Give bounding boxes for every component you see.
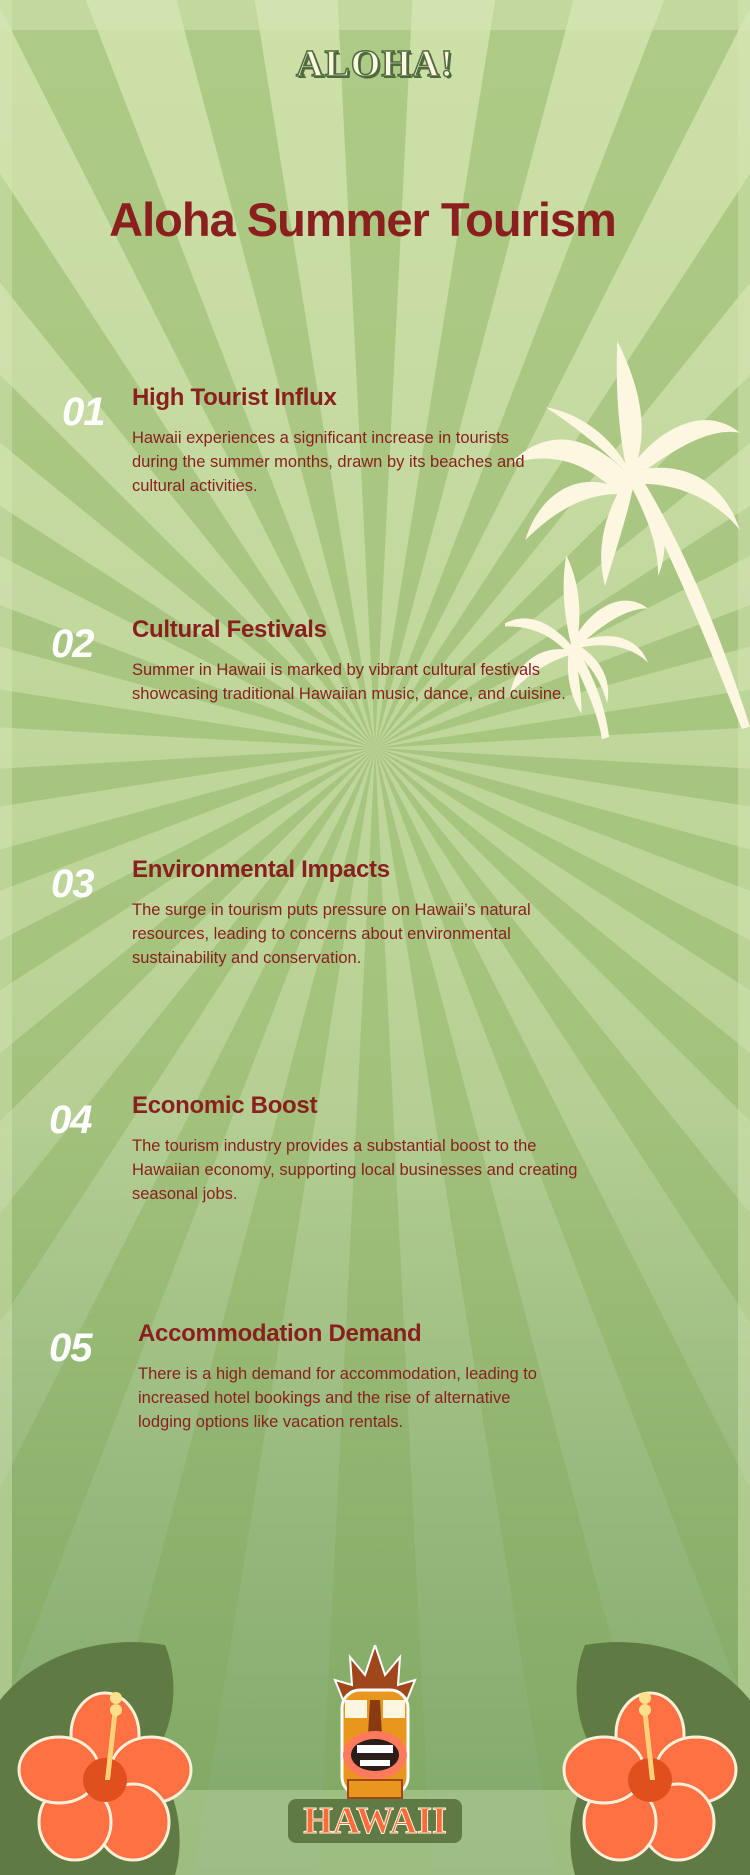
item 01: High Tourist Influx	[132, 384, 336, 411]
item 04: 04	[49, 1098, 92, 1142]
icon: tiki mask	[333, 1645, 417, 1799]
item 01	[62, 384, 525, 495]
item 03: The surge in tourism puts pressure on Hawaii’s natural resources, leading to concerns about environmental sustainability and conservation.	[132, 901, 531, 967]
item 04: Economic Boost	[132, 1092, 317, 1119]
footer badge HAWAII: HAWAII	[303, 1800, 447, 1842]
item 04	[49, 1092, 577, 1203]
item 05: 05	[49, 1326, 92, 1370]
item 02: 02	[51, 622, 94, 666]
item 02: Summer in Hawaii is marked by vibrant cultural festivals showcasing traditional Hawaiian music, dance, and cuisine.	[132, 661, 566, 703]
title: Aloha Summer Tourism	[109, 193, 616, 246]
item 03: 03	[51, 862, 94, 906]
item 01: Hawaii experiences a significant increase in tourists during the summer months, drawn by its beaches and cultural activities.	[132, 429, 525, 495]
item 04: The tourism industry provides a substantial boost to the Hawaiian economy, supporting local businesses and creating seasonal jobs.	[132, 1137, 577, 1203]
item 03: Environmental Impacts	[132, 856, 390, 883]
item 05: Accommodation Demand	[138, 1320, 421, 1347]
item 03	[51, 856, 531, 967]
item 02: Cultural Festivals	[132, 616, 327, 643]
left leaves and hibiscus	[0, 1642, 192, 1875]
item 01: 01	[62, 390, 104, 434]
item 05	[49, 1320, 537, 1431]
right leaves and hibiscus	[562, 1642, 750, 1875]
item 02	[51, 616, 566, 703]
palm trees illustration	[505, 341, 750, 739]
item 05: There is a high demand for accommodation, leading to increased hotel bookings and the rise of alternative lodging options like vacation rentals.	[138, 1365, 537, 1431]
header badge ALOHA!: ALOHA!	[296, 43, 454, 85]
